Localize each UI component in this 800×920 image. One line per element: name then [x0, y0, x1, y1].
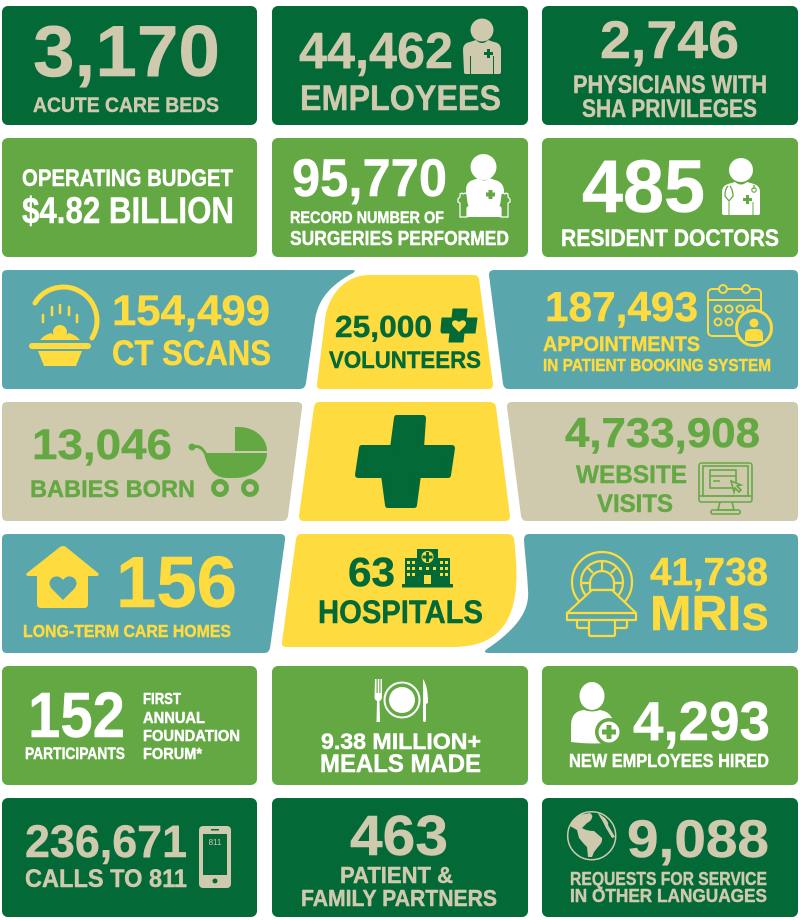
panel: MRIs	[485, 534, 798, 653]
panel: meals made	[272, 666, 528, 785]
label: operating budget: OPERATING BUDGET	[22, 165, 233, 192]
label: MRIs: MRIs	[650, 587, 769, 641]
label: employees: EMPLOYEES	[300, 79, 501, 118]
label: visits: VISITS	[597, 490, 673, 518]
label: surgeries performed: SURGERIES PERFORMED	[290, 228, 509, 250]
stat: 41,738: 41,738	[650, 551, 768, 594]
panel: new employees	[542, 666, 798, 785]
panel: hospitals	[282, 534, 516, 647]
stat: 485: 485	[582, 145, 705, 228]
panel: resident doctors	[542, 138, 798, 257]
stat: 152: 152	[28, 679, 125, 751]
stat: 9,088: 9,088	[627, 810, 769, 869]
label: babies born: BABIES BORN	[30, 476, 195, 503]
label: first annual foundation forum: FIRST	[143, 691, 181, 708]
stat: 236,671: 236,671	[25, 816, 187, 867]
panel: long-term care homes	[2, 534, 285, 653]
icon: cross with heart	[441, 309, 477, 342]
icon: hospital building	[402, 549, 453, 588]
label: patient and: PATIENT &	[340, 862, 453, 888]
icon: computer monitor	[699, 463, 752, 514]
label: family partners: FAMILY PARTNERS	[301, 885, 497, 911]
stat: 4,733,908: 4,733,908	[565, 409, 760, 456]
label: physicians with: PHYSICIANS WITH	[573, 71, 767, 99]
label: website: WEBSITE	[576, 461, 687, 489]
label: meal count: 9.38 MILLION+	[321, 729, 481, 754]
label: requests for service: REQUESTS FOR SERVICE	[570, 868, 767, 889]
panel: other languages	[542, 798, 798, 917]
stat: 13,046: 13,046	[32, 421, 172, 469]
label: SHA privileges: SHA PRIVILEGES	[582, 95, 757, 123]
label: volunteers: VOLUNTEERS	[329, 347, 481, 374]
label: new employees hired: NEW EMPLOYEES HIRED	[569, 751, 769, 771]
panel: patient and family partners	[272, 798, 528, 917]
label: first annual foundation forum: ANNUAL	[143, 710, 205, 727]
label: long-term care homes: LONG-TERM CARE HOMES	[23, 621, 231, 641]
icon: mobile phone	[199, 826, 231, 888]
label: hospitals: HOSPITALS	[318, 594, 483, 630]
panel: calls to 811	[2, 798, 257, 917]
stat: 187,493: 187,493	[545, 283, 698, 330]
panel: foundation forum	[2, 666, 257, 785]
stat: 44,462: 44,462	[299, 22, 453, 79]
panel: CT scans	[2, 270, 355, 389]
stat: 63: 63	[348, 549, 395, 595]
icon: calendar with person	[708, 285, 772, 346]
label: in patient booking system: IN PATIENT BOOKING SYSTEM	[543, 355, 771, 375]
panel: volunteers	[317, 275, 493, 389]
panel: employees	[272, 6, 528, 125]
icon: baby stroller	[188, 427, 267, 494]
icon: employee	[463, 18, 501, 74]
stat: 3,170: 3,170	[33, 12, 220, 92]
stat: budget amount: $4.82 BILLION	[22, 190, 234, 231]
stat: 2,746: 2,746	[600, 11, 739, 70]
stat: 4,293: 4,293	[633, 690, 770, 752]
label: appointments: APPOINTMENTS	[543, 333, 700, 356]
stat: 154,499: 154,499	[112, 287, 270, 335]
icon: mobile phone: 811	[209, 838, 222, 847]
stat: 95,770: 95,770	[292, 149, 447, 208]
panel: surgeries	[272, 138, 528, 257]
icon: globe	[568, 812, 616, 860]
icon: green cross	[358, 418, 452, 505]
stat: 25,000: 25,000	[335, 309, 432, 344]
label: calls to 811: CALLS TO 811	[25, 865, 187, 893]
panel: operating budget	[2, 138, 257, 257]
label: first annual foundation forum	[143, 691, 240, 763]
panel: babies born	[2, 402, 302, 521]
label: CT scans: CT SCANS	[112, 334, 271, 373]
label: acute care beds: ACUTE CARE BEDS	[33, 94, 219, 117]
label: participants: PARTICIPANTS	[25, 745, 125, 763]
icon: house with heart	[26, 546, 99, 608]
panel: website visits	[507, 402, 798, 521]
panel: physicians	[542, 6, 798, 125]
label: record number of: RECORD NUMBER OF	[290, 208, 444, 227]
icon: person with plus	[571, 682, 623, 746]
icon: surgeon with gloves	[458, 154, 510, 217]
icon: plate and cutlery	[375, 679, 428, 722]
icon: doctor with stethoscope	[722, 158, 760, 215]
stat: 156: 156	[116, 543, 237, 623]
icon: CT scanner	[29, 287, 97, 366]
stat: 463: 463	[350, 804, 448, 868]
panel: appointments	[489, 270, 798, 389]
label: in other languages: IN OTHER LANGUAGES	[570, 885, 767, 906]
panel: acute care beds	[2, 6, 257, 125]
label: first annual foundation forum: FORUM*	[143, 746, 203, 763]
label: first annual foundation forum: FOUNDATION	[143, 728, 240, 745]
panel: centre cross	[299, 402, 510, 521]
icon: MRI machine	[567, 552, 636, 636]
label: meals made: MEALS MADE	[320, 750, 481, 778]
